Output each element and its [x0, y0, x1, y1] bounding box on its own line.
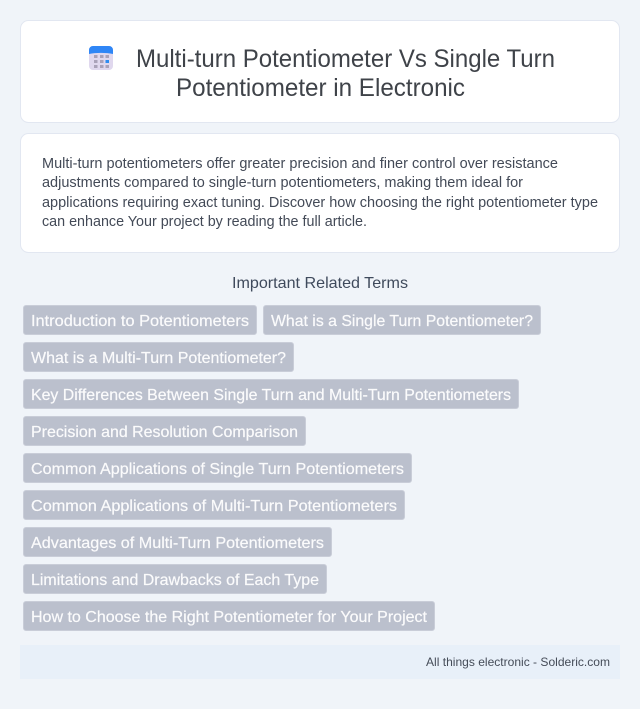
- tag: limitations: Limitations and Drawbacks of Each Type: [31, 572, 319, 589]
- tag: how to choose: [24, 602, 434, 630]
- tag: advantages: [24, 528, 332, 556]
- icon: calendar: [89, 46, 113, 70]
- panel: introduction: applications requiring exact tuning. Discover how choosing the right potentiometer type: [42, 195, 598, 211]
- tag: key differences: [24, 380, 518, 408]
- tag: single turn applications: [24, 454, 412, 482]
- panel: introduction: Multi-turn potentiometers offer greater precision and finer control over resistance: [42, 156, 558, 172]
- panel: introduction: can enhance Your project by reading the full article.: [42, 214, 367, 230]
- panel: title card: [20, 20, 620, 122]
- tag: introduction: [24, 306, 256, 334]
- tag: precision: Precision and Resolution Comparison: [31, 424, 298, 441]
- panel: introduction: adjustments compared to single-turn potentiometers, making them ideal for: [42, 175, 523, 191]
- tag: multi-turn: What is a Multi-Turn Potentiometer?: [31, 350, 286, 367]
- tag: multi-turn applications: [24, 490, 404, 520]
- title: Potentiometer in Electronic: [176, 74, 465, 102]
- tag list: [24, 306, 540, 630]
- tag: how to choose: How to Choose the Right Potentiometer for Your Project: [31, 609, 428, 626]
- tag: advantages: Advantages of Multi-Turn Potentiometers: [31, 535, 324, 552]
- tag: single turn: [264, 306, 540, 334]
- footer: [20, 645, 620, 679]
- tag: introduction: Introduction to Potentiometers: [31, 313, 249, 330]
- footer: All things electronic - Solderic.com: [426, 655, 610, 669]
- heading: related terms: Important Related Terms: [232, 275, 408, 292]
- tag: multi-turn: [24, 342, 294, 372]
- tag: single turn applications: Common Applications of Single Turn Potentiometers: [31, 461, 404, 478]
- title: [136, 45, 555, 102]
- tag: precision: [24, 416, 306, 446]
- tag: single turn: What is a Single Turn Potentiometer?: [271, 313, 533, 330]
- panel: introduction: [20, 134, 620, 252]
- tag: key differences: Key Differences Between Single Turn and Multi-Turn Potentiometers: [31, 387, 511, 404]
- title: Multi-turn Potentiometer Vs Single Turn: [136, 45, 555, 73]
- tag: multi-turn applications: Common Applications of Multi-Turn Potentiometers: [31, 498, 397, 515]
- tag: limitations: [24, 564, 326, 594]
